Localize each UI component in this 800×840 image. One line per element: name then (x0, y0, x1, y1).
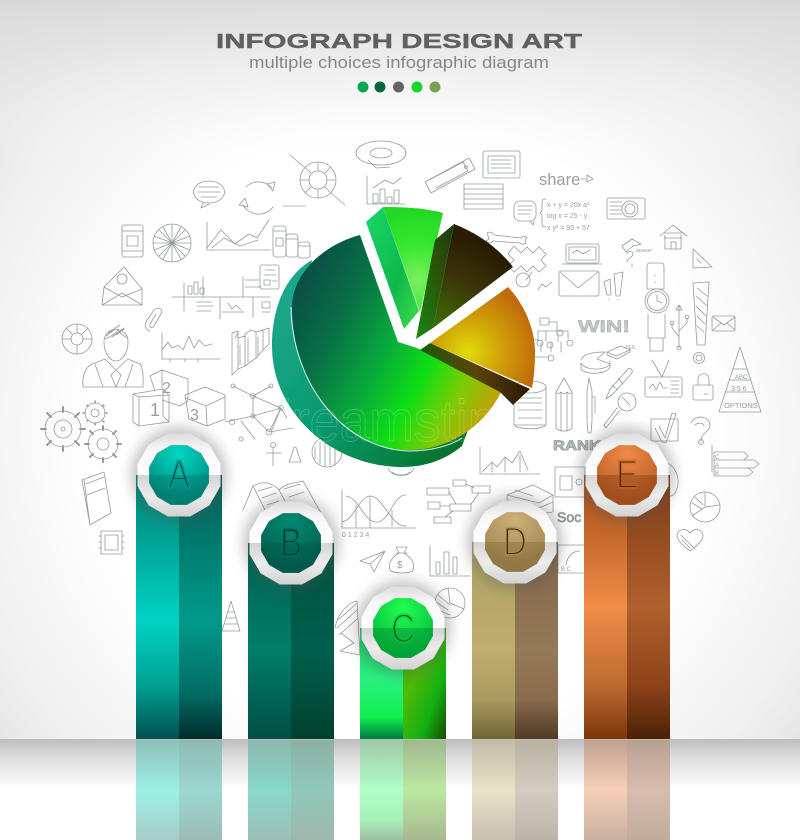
badge A (132, 428, 226, 522)
doodle: camera (607, 198, 645, 219)
doodle: wave chart (342, 490, 416, 539)
doodle: blob behind badge (665, 462, 678, 496)
doodle: checkbox (651, 413, 678, 443)
doodle: phone (122, 225, 143, 257)
reflections on floor (0, 739, 800, 840)
hand-drawn doodle cloud (41, 141, 761, 655)
doodle: mail (559, 271, 599, 296)
doodle: speech bubble (194, 181, 224, 208)
doodle: money bag: $ (397, 560, 403, 571)
doodle: heart (677, 529, 703, 551)
doodle: step arrows: A (715, 463, 719, 469)
doodle: formula block: x y² = 93 + 57 (547, 225, 590, 232)
doodle: cycle arrows (239, 182, 275, 214)
pie: lime slice edge (366, 207, 419, 329)
doodle: pie slice (581, 345, 636, 373)
doodle: question mark (691, 417, 710, 444)
doodle: bubble (514, 201, 536, 225)
badge C: C (391, 606, 415, 651)
pie: lime slice face (383, 207, 443, 312)
doodle: timeline (172, 277, 270, 319)
pagination dots (358, 82, 440, 92)
doodle: pyramid options: OPTIONS (724, 401, 758, 410)
reflection: bar B (248, 740, 334, 840)
column D (468, 495, 562, 739)
doodle: chip (99, 531, 124, 554)
reflection: bar D (472, 740, 558, 840)
doodle: laptop (562, 244, 602, 264)
doodle: puzzle crosses (508, 246, 552, 290)
badge B: B (280, 520, 302, 565)
doodle: radial pie gear (283, 155, 345, 206)
3d pie chart (262, 207, 542, 467)
doodle: angled pen (606, 368, 632, 399)
bar B (248, 543, 334, 739)
doodle: question with arrow: answer (636, 248, 652, 254)
doodle: peak chart (480, 447, 540, 474)
bar E (584, 475, 670, 739)
doodle: share label: share (539, 171, 580, 189)
doodle: text stack (464, 184, 503, 209)
bar C (360, 628, 446, 739)
doodle: pie slice: YES (625, 345, 636, 351)
title: INFOGRAPH DESIGN ART (216, 30, 583, 53)
pie: orange slice face (430, 287, 535, 388)
doodle: web frame (483, 151, 520, 178)
doodle: wrist watch (645, 263, 669, 351)
doodle: at envelope (102, 267, 142, 305)
subtitle: multiple choices infographic diagram (249, 54, 549, 72)
doodle: formula block (540, 199, 590, 232)
doodle: striped pie small (312, 437, 342, 467)
doodle: house (660, 225, 687, 249)
pie: main slice extrusion (272, 260, 470, 467)
doodle: number cubes (133, 370, 225, 426)
doodle: stick figures (266, 442, 301, 466)
pie: main slice face (292, 235, 502, 450)
doodle: side pie (690, 492, 720, 522)
badge A: A (168, 452, 190, 497)
doodle: number cubes: 2 (162, 380, 171, 397)
doodle: wallet (555, 467, 585, 497)
doodle: small envelope (712, 316, 735, 331)
column B (244, 496, 338, 739)
doodle: magnifier (604, 393, 636, 428)
doodle: striped bell (335, 601, 360, 655)
doodle: pyramid options: 3 5 6 (731, 386, 747, 393)
doodle: step arrows (712, 445, 759, 477)
doodle: network graph (225, 384, 293, 441)
doodle: small line chart (162, 333, 220, 362)
doodle: corner triangle (693, 249, 712, 268)
doodle: stack of books (507, 485, 553, 514)
doodle: 3d bar chart (232, 328, 269, 375)
column C (356, 581, 450, 739)
doodle: exclamation marks (604, 272, 623, 300)
pie: dark slice edge (416, 224, 454, 339)
doodle: open book (243, 481, 321, 516)
doodle: folder (558, 545, 585, 573)
badge C (356, 581, 450, 675)
doodle: donut diagram (62, 324, 92, 354)
doodle: step arrows: B (715, 471, 719, 477)
doodle: book upright (82, 472, 111, 525)
doodle: step arrows: C (715, 455, 720, 461)
doodle: paper clip (145, 308, 162, 331)
doodle: mind map (427, 480, 490, 523)
column A (132, 428, 226, 739)
pie: dark slice face (433, 224, 513, 328)
badge D: D (503, 519, 527, 564)
doodle: pen (587, 378, 595, 433)
doodle: button (694, 352, 704, 364)
doodle: win lettering: WIN! (578, 317, 630, 336)
doodle: tv set (645, 360, 682, 397)
doodle: pyramid options (719, 347, 761, 412)
doodle: org tree (532, 318, 573, 361)
doodle: wave chart: 0 1 2 3 4 (342, 532, 369, 539)
doodle: padlock (693, 374, 713, 400)
doodle: growing bars (367, 176, 405, 204)
doodle: data can (514, 381, 546, 429)
doodle: line chart (207, 220, 271, 250)
doodle: small bar chart (430, 546, 470, 576)
doodle: folder: B C (561, 567, 572, 573)
doodle: striped pyramid (222, 601, 240, 631)
doodle: pencil (556, 378, 572, 431)
reflection: bar E (584, 740, 670, 840)
doodle: clipboard (260, 265, 279, 289)
doodle: money bag (389, 547, 414, 573)
doodle: big exclamation (693, 282, 709, 345)
reflection: bar A (136, 740, 222, 840)
doodle: sketched pie (153, 224, 191, 262)
badge B (244, 496, 338, 590)
doodle: rank lettering: RANK (553, 437, 601, 453)
column E (580, 428, 674, 739)
badge E: E (616, 452, 638, 497)
doodle: tilted smartphone (425, 158, 475, 193)
doodle: question with arrow (622, 239, 652, 267)
doodle: businessman (83, 325, 143, 387)
pie: main slice rim highlight (291, 307, 462, 451)
doodle: usb trident (670, 305, 689, 350)
doodle: paper plane (360, 551, 385, 572)
doodle: formula block: x + y = 20x a² (547, 202, 590, 209)
bar A (136, 475, 222, 739)
badge D (468, 495, 562, 589)
doodle: cans (273, 226, 310, 258)
doodle: fingerprint (388, 468, 414, 476)
reflection: bar C (360, 740, 446, 840)
doodle: pyramid options: ABC (735, 375, 748, 381)
bar D (472, 542, 558, 739)
doodle: formula block: log x = 25 - y (547, 213, 588, 220)
doodle: wrench (486, 232, 527, 244)
doodle: number cubes: 3 (190, 407, 199, 424)
doodle: number cubes: 1 (150, 400, 160, 420)
floor band (0, 739, 800, 840)
doodle: ring diagram (356, 141, 406, 168)
doodle: social lettering: Soc (557, 509, 581, 525)
doodle: gears (41, 401, 121, 462)
watermark: dreamstime (262, 389, 542, 454)
badge E (580, 428, 674, 522)
doodle: striped pie chart (435, 588, 465, 618)
pie: orange slice extrusion (420, 343, 530, 405)
